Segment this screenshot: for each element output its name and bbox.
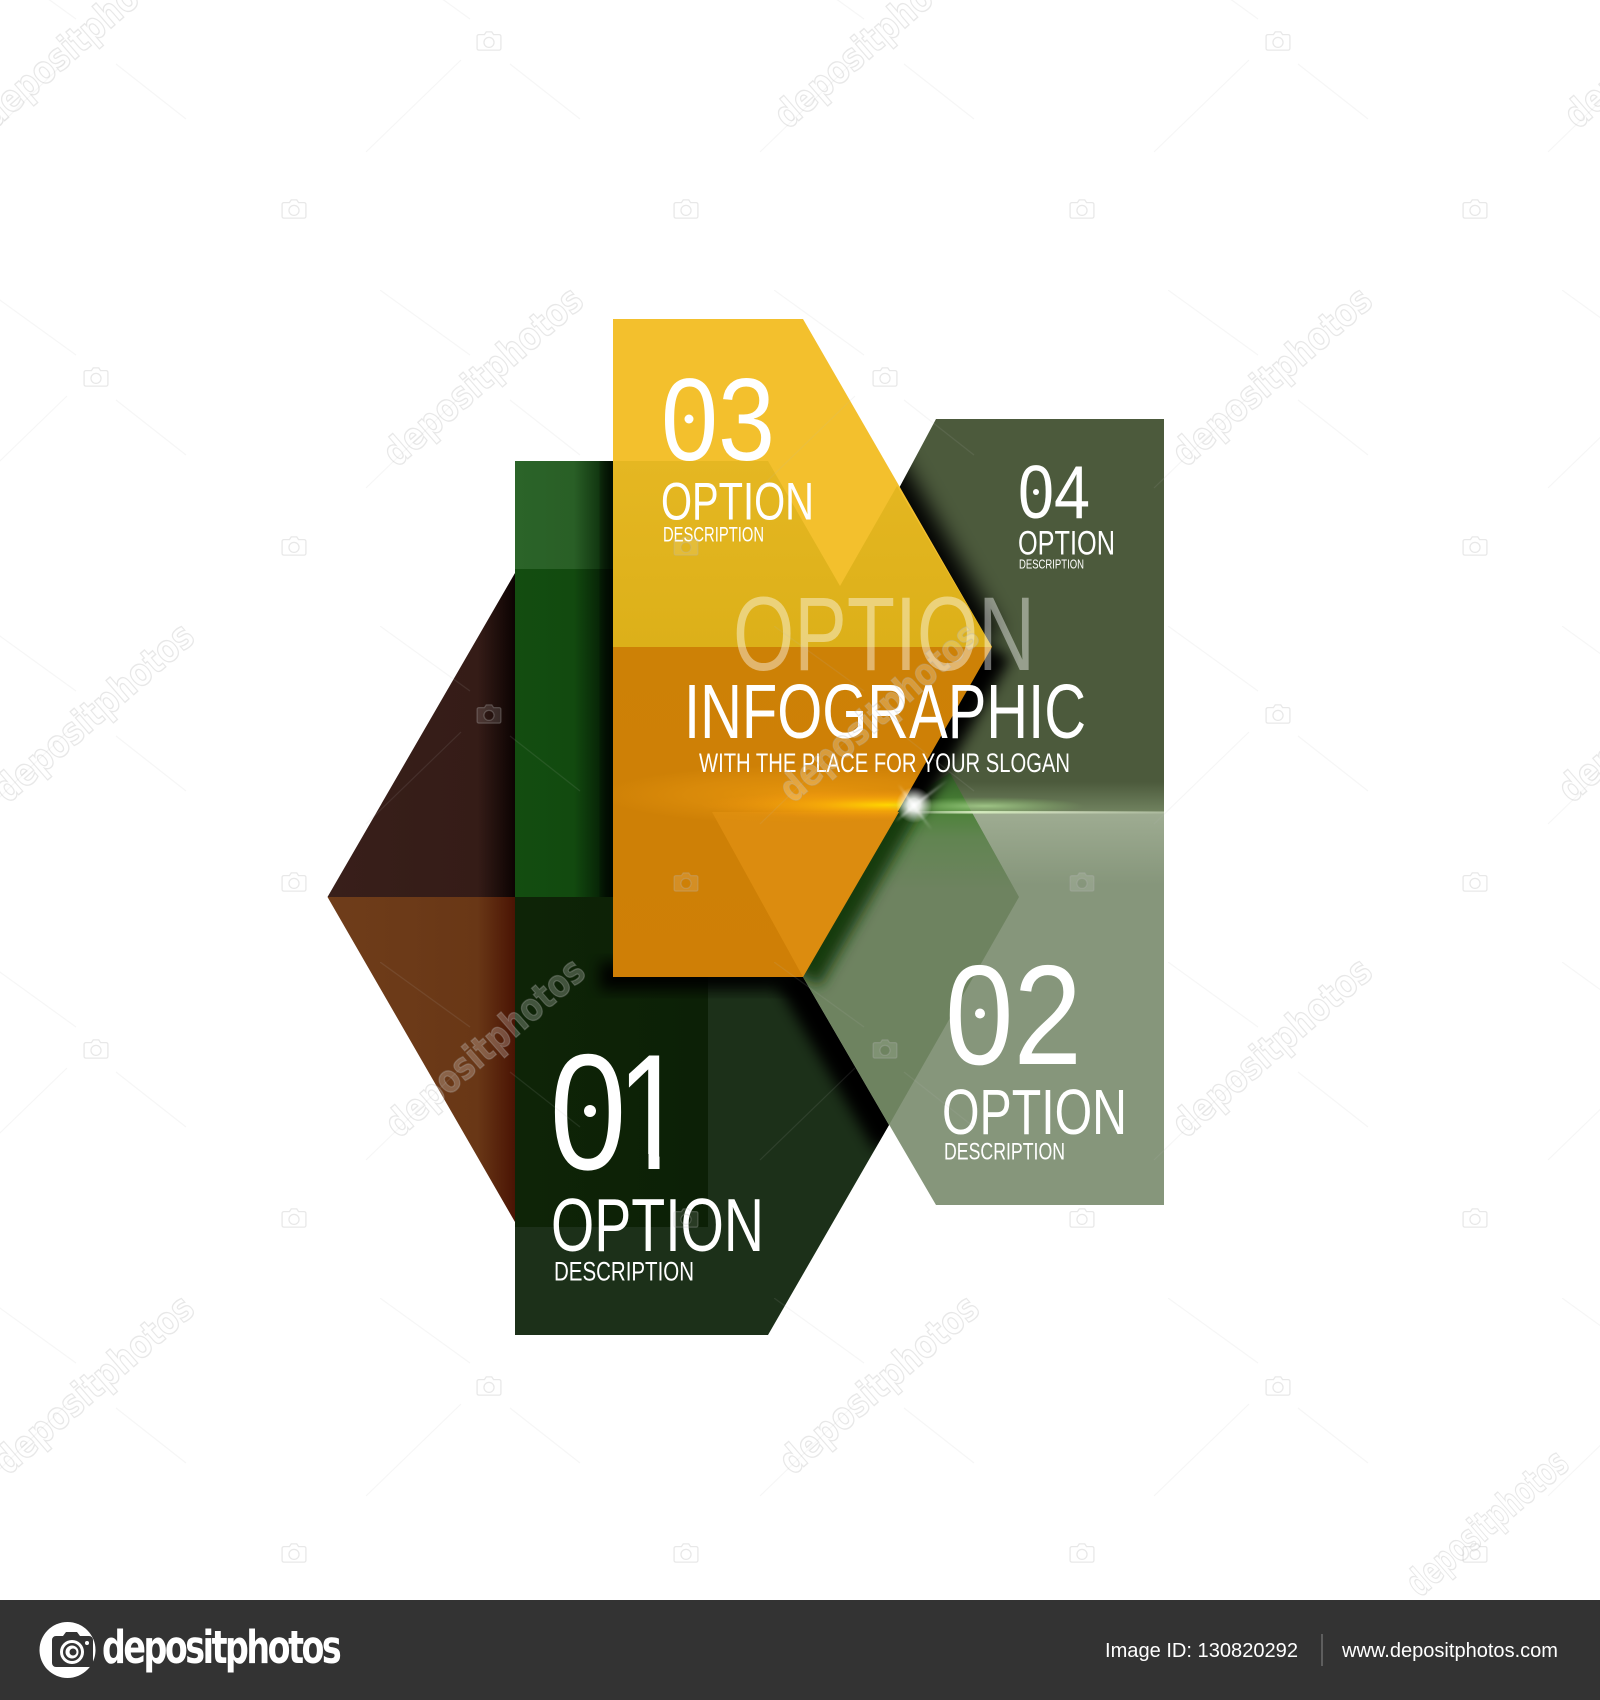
panel: brown left wedge — [328, 573, 515, 1222]
block text: 03 option: OPTION — [661, 472, 814, 532]
panel: 01 dark green arrow — [515, 897, 895, 1335]
block text: 04 option: DESCRIPTION — [1019, 558, 1084, 572]
title: infographic: WITH THE PLACE FOR YOUR SLOGAN — [699, 748, 1070, 778]
footer logo wordmark: depositphotos — [102, 1622, 342, 1674]
block text: 03 option — [661, 354, 814, 546]
light flare — [885, 780, 1085, 830]
block text: 03 option: 03 — [661, 354, 775, 485]
block text: 01 option: OPTION — [551, 1183, 764, 1267]
panel: green vertical bar — [515, 461, 613, 897]
block text: 01 option: DESCRIPTION — [554, 1256, 694, 1286]
block text: 03 option: DESCRIPTION — [663, 524, 764, 546]
footer divider — [1322, 1634, 1323, 1666]
title: infographic — [684, 576, 1086, 778]
block text: 02 option: DESCRIPTION — [944, 1138, 1065, 1166]
shadow: yellow arrow on green bar — [600, 461, 613, 897]
block text: 02 option — [942, 936, 1127, 1166]
watermark layer: depositphotos — [1163, 278, 1381, 475]
block text: 01 option: 0 — [550, 1020, 626, 1204]
block text: 04 option: 04 — [1018, 450, 1090, 534]
footer website: www.depositphotos.com — [1341, 1640, 1558, 1662]
block text: 01 option: 1 — [617, 1020, 686, 1204]
icon: camera logo — [40, 1622, 96, 1678]
footer image id: Image ID: 130820292 — [1105, 1640, 1298, 1662]
block text: 04 option: OPTION — [1018, 524, 1115, 562]
watermark layer: depositphotos — [376, 949, 594, 1146]
block text: 04 option — [1018, 450, 1115, 572]
watermark layer: depositphotos — [374, 278, 592, 475]
infographic graphic — [328, 310, 1164, 1335]
watermark layer: depositphotos — [770, 1286, 988, 1483]
block text: 02 option: 02 — [945, 936, 1082, 1095]
title: infographic: OPTION — [733, 576, 1035, 693]
watermark layer: depositphotos — [770, 614, 988, 811]
footer bar — [0, 1600, 1600, 1700]
panel: 02 sage green arrow — [803, 647, 1164, 1205]
panel: 04 olive block — [900, 419, 1164, 812]
block text: 02 option: OPTION — [942, 1076, 1127, 1148]
title: infographic: INFOGRAPHIC — [684, 669, 1086, 755]
panel: 03 yellow and orange arrow — [613, 319, 992, 977]
watermark layer: depositphotos — [1163, 949, 1381, 1146]
block text: 01 option — [554, 1054, 760, 1281]
